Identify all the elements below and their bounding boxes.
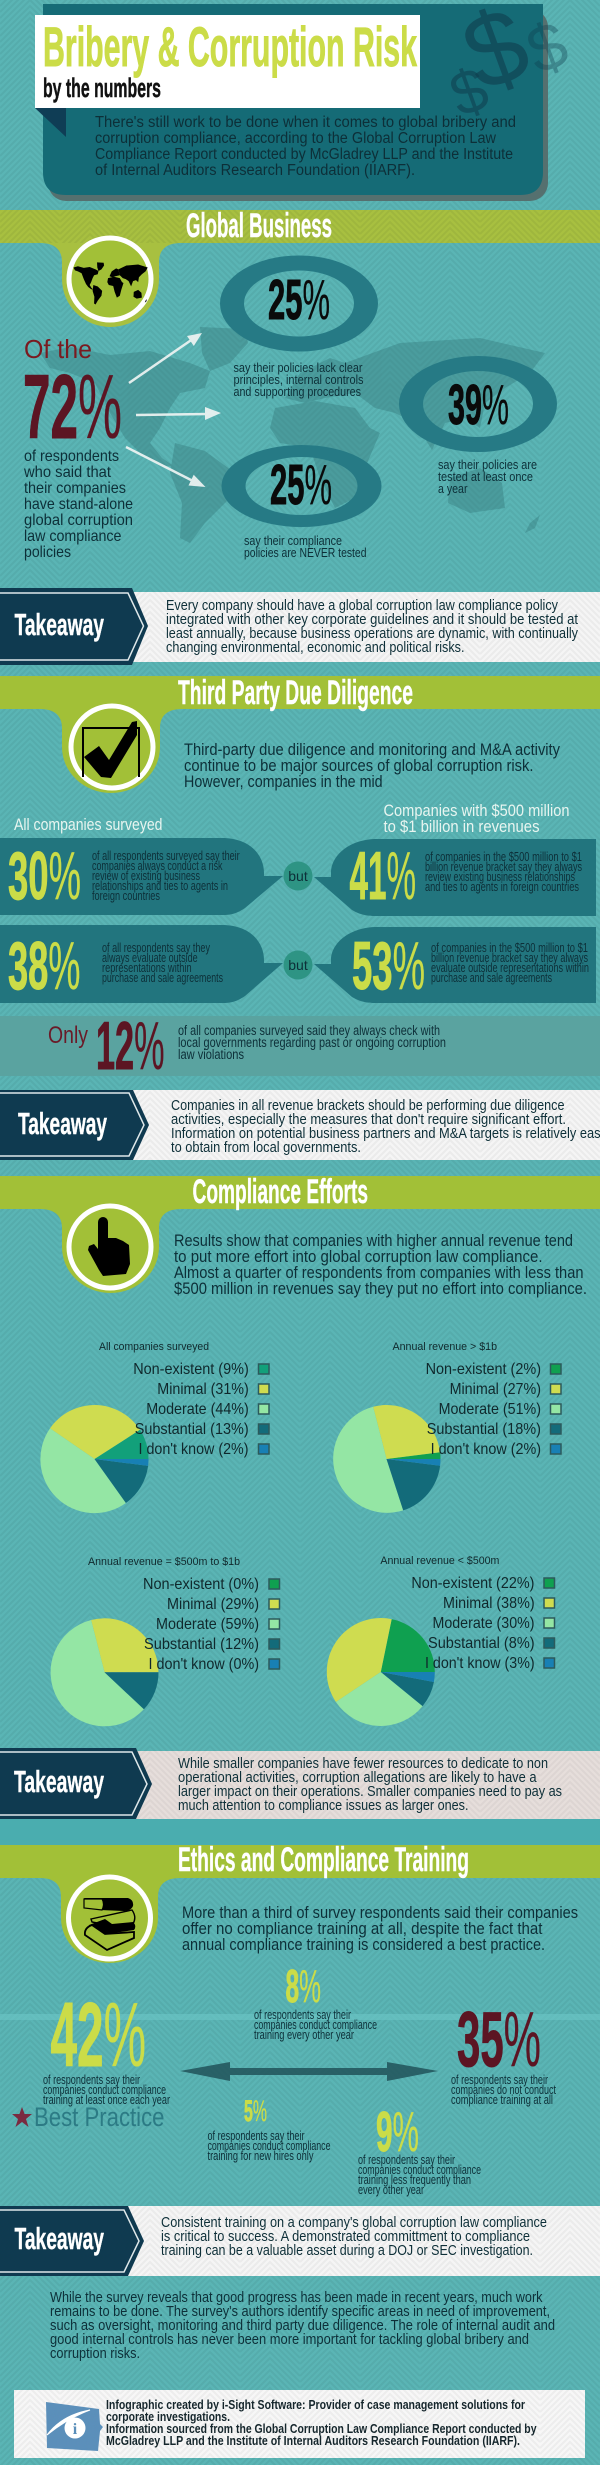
column label: mid-size companies: to $1 billion in revenues [384,817,540,836]
stat: of the 72 percent: their companies [24,480,126,497]
pie chart: all companies surveyed: Minimal (31%) [157,1381,249,1398]
takeaway 1: Takeaway [14,607,104,642]
pie chart: annual revenue under 500m: Substantial (8%) [428,1635,535,1652]
intro text: Compliance Report conducted by McGladrey LLP and the Institute [95,146,513,163]
section band [0,676,600,793]
stat: 9 percent: every other year [358,2183,424,2197]
stat: of the 72 percent: policies [24,544,71,561]
pie chart: annual revenue over 1b [333,1341,561,1513]
stat: 5 percent: companies conduct compliance [208,2139,331,2153]
takeaway 4: is critical to success. A demonstrated committment to compliance [161,2228,530,2245]
takeaway 4 [0,2206,600,2276]
intro text: corruption compliance, according to the Global Corruption Law [95,130,497,147]
stat: 8 percent: training every other year [254,2028,354,2042]
pie chart: annual revenue over 1b: Non-existent (2%) [426,1361,541,1378]
column label: mid-size companies [384,801,570,836]
best practice badge: Best Practice [34,2102,164,2132]
callout: only 12 percent [0,1008,600,1084]
stat: 30 percent: review of existing business [92,869,200,883]
stat: 42 percent: 42% [50,1985,146,2086]
stat: 38 percent [0,925,283,1004]
pie chart: annual revenue 500m to 1b: Minimal (29%) [167,1596,259,1613]
stat: 38 percent: purchase and sale agreements [102,971,223,985]
section band [0,1845,600,1963]
pie chart: all companies surveyed: Non-existent (9%) [133,1361,249,1378]
intro text [182,1904,578,1954]
column label: all companies: All companies surveyed [14,815,162,834]
heading: Compliance Efforts [192,1173,368,1211]
stat: 30 percent: foreign countries [92,889,160,903]
stat: 41 percent [314,838,596,916]
pie chart: annual revenue 500m to 1b: I don't know (0%) [148,1656,259,1673]
intro text: However, companies in the mid [184,773,383,791]
intro text: to put more effort into global corruption law compliance. [174,1248,542,1266]
but badge [284,950,312,980]
stat: 53 percent: purchase and sale agreements [431,971,552,985]
closing paragraph: corruption risks. [50,2345,140,2362]
callout: only 12 percent: 12% [96,1008,164,1084]
icon: stack of books [68,1877,150,1959]
pie chart: annual revenue 500m to 1b: Non-existent (0%) [143,1576,259,1593]
stat: 30 percent: companies always conduct a risk [92,859,223,873]
stat: 42 percent: training at least once each year [43,2093,170,2107]
stat: 8 percent [254,1960,377,2042]
stat: 38 percent: representations within [102,961,192,975]
stat: 5 percent: training for new hires only [208,2149,314,2163]
stat: 5 percent: of respondents say their [208,2129,304,2143]
credits text: McGladrey LLP and the Institute of Internal Auditors Research Foundation (IIARF). [106,2433,520,2448]
stat: 8 percent: of respondents say their [254,2008,351,2022]
pie chart: annual revenue under 500m: Annual revenue < $500m [380,1555,499,1567]
takeaway 2: to obtain from local governments. [171,1139,361,1156]
stat: 25 percent never tested: policies are NEVER tested [244,545,366,560]
stat: 35 percent [451,1995,556,2107]
stat: of the 72 percent: global corruption [24,512,133,529]
intro text: There's still work to be done when it comes to global bribery and [95,114,516,131]
intro text: continue to be major sources of global corruption risk. [184,757,534,775]
stat: 9 percent: 9% [376,2100,419,2164]
intro text: offer no compliance training at all, despite the fact that [182,1920,543,1938]
stat: of the 72 percent: have stand-alone [24,496,133,513]
stat: of the 72 percent: 72% [23,357,122,458]
stat: 35 percent: 35% [457,1995,541,2083]
stat: of the 72 percent: law compliance [24,528,122,545]
stat: 39 percent tested annually: 39% [448,373,509,437]
pie chart: annual revenue 500m to 1b: Substantial (12%) [144,1636,259,1653]
background world map [40,327,545,543]
section band [0,210,600,327]
heading: Global Business [186,207,332,245]
stat: of the 72 percent: of respondents [24,448,119,465]
takeaway 2: Takeaway [18,1106,107,1141]
but badge: but [288,868,308,884]
stat: 42 percent: companies conduct compliance [43,2083,166,2097]
intro text [95,114,516,179]
stat: 25 percent lack principles: 25% [268,268,330,332]
stat: 8 percent: companies conduct compliance [254,2018,377,2032]
stat: of the 72 percent: Of the [24,334,92,364]
arrows [126,333,221,487]
stat: 8 percent: 8% [286,1960,321,2012]
pie chart: annual revenue over 1b: Minimal (27%) [450,1381,541,1398]
stat: 39 percent tested annually: tested at least once [438,469,533,484]
icon: dollar signs [441,0,577,131]
takeaway 3 [0,1748,600,1819]
stat: 53 percent [314,927,596,1004]
heading: Third Party Due Diligence [178,674,413,712]
pie chart: annual revenue 500m to 1b [51,1556,280,1726]
but badge [284,862,312,890]
callout: only 12 percent: of all companies surveyed said they always check with [178,1023,440,1038]
pie chart: annual revenue over 1b: Moderate (51%) [439,1401,541,1418]
takeaway 3: Takeaway [14,1764,104,1799]
stat: 30 percent: 30% [8,838,81,914]
stat: 5 percent: 5% [244,2095,267,2128]
pie chart: annual revenue 500m to 1b: Moderate (59%) [156,1616,259,1633]
intro text: of Internal Auditors Research Foundation (IIARF). [95,162,415,179]
icon: world map [69,238,151,320]
takeaway 3: operational activities, corruption allegations are likely to have a [178,1769,537,1786]
pie chart: all companies surveyed: I don't know (2%) [138,1441,248,1458]
stat: 35 percent: companies do not conduct [451,2083,556,2097]
stat: 30 percent: relationships and ties to agents in [92,879,228,893]
icon: checkbox [71,706,153,788]
icon: dollar signs: $ [517,6,577,88]
stat: of the 72 percent [23,334,133,561]
pie chart: annual revenue 500m to 1b: Annual revenue = $500m to $1b [88,1556,240,1568]
panel: header [35,0,577,201]
pie chart: annual revenue under 500m: Non-existent (22%) [411,1575,534,1592]
panel: third party due diligence [0,674,600,1084]
pie chart: all companies surveyed: Substantial (13%) [135,1421,249,1438]
stat: 41 percent: 41% [350,838,416,914]
panel: footer credits [14,2390,585,2458]
stat: 53 percent: 53% [352,928,425,1004]
stat: 25 percent lack principles [220,255,378,399]
stat: 25 percent never tested: 25% [270,453,332,517]
takeaway 1: changing environmental, economic and political risks. [166,639,464,656]
intro text: annual compliance training is considered a best practice. [182,1936,545,1954]
stat: 42 percent: of respondents say their [43,2073,140,2087]
stat: 5 percent [208,2095,331,2163]
subtitle: by the numbers [43,73,161,103]
callout: only 12 percent: Only [48,1022,88,1049]
pie chart: all companies surveyed: Moderate (44%) [146,1401,249,1418]
icon: i-Sight logo: i [73,2421,78,2438]
stat: 39 percent tested annually: say their policies are [438,457,537,472]
pie chart: annual revenue under 500m: I don't know (3%) [425,1655,535,1672]
takeaway 3: much attention to compliance issues as larger ones. [178,1797,468,1814]
stat: of the 72 percent: who said that [23,464,112,481]
panel: ethics and compliance training [0,1841,600,2197]
stat: 9 percent: companies conduct compliance [358,2163,481,2177]
but badge: but [288,957,308,973]
stat: 38 percent: of all respondents say they [102,941,211,955]
takeaway 2 [0,1090,600,1160]
closing paragraph: good internal controls has never been more important for tackling global bribery and [50,2331,529,2348]
pie chart: all companies surveyed [40,1341,269,1513]
callout: only 12 percent: local governments regarding past or ongoing corruption [178,1035,446,1050]
closing paragraph [50,2289,555,2362]
pie chart: annual revenue over 1b: Annual revenue > $1b [392,1341,497,1353]
column label: mid-size companies: Companies with $500 million [384,801,570,820]
intro text [174,1232,587,1298]
stat: 39 percent tested annually: a year [438,481,468,496]
stat: 35 percent: of respondents say their [451,2073,548,2087]
stat: 9 percent [358,2100,481,2197]
takeaway 4: Takeaway [14,2221,104,2256]
pie chart: annual revenue over 1b: I don't know (2%) [431,1441,541,1458]
takeaway 1 [0,588,600,665]
intro text: Third-party due diligence and monitoring and M&A activity [184,741,561,759]
credits text [106,2397,537,2448]
stat: 25 percent lack principles: principles, internal controls [234,372,364,387]
stat: 35 percent: compliance training at all [451,2093,553,2107]
pie chart: all companies surveyed: All companies surveyed [99,1341,209,1353]
pie chart: annual revenue under 500m: Moderate (30%) [432,1615,534,1632]
stat: 30 percent: of all respondents surveyed say their [92,849,240,863]
section band [0,1176,600,1293]
panel: global business [0,207,600,561]
icon: i-Sight logo [46,2402,103,2451]
pie chart: annual revenue under 500m [327,1555,554,1726]
stat: 30 percent [0,838,283,915]
panel: compliance efforts [0,1173,600,1726]
stat: 25 percent lack principles: say their policies lack clear [234,360,363,375]
stat: 39 percent tested annually [399,356,557,496]
icon: pointing hand [69,1206,151,1288]
pie chart: annual revenue over 1b: Substantial (18%) [427,1421,541,1438]
stat: 9 percent: of respondents say their [358,2153,455,2167]
stat: 38 percent: always evaluate outside [102,951,198,965]
stat: 25 percent never tested: say their compliance [244,533,342,548]
stat: 25 percent never tested [222,445,382,560]
double-headed arrow [180,2062,438,2081]
takeaway 4: training can be a valuable asset during a DOJ or SEC investigation. [161,2242,533,2259]
callout: only 12 percent: law violations [178,1047,244,1062]
icon: dollar signs: $ [441,54,497,131]
intro text [184,741,561,791]
stat: 38 percent: 38% [8,928,80,1004]
credits text: corporate investigations. [106,2409,230,2424]
pie chart: annual revenue under 500m: Minimal (38%) [443,1595,535,1612]
stat: 9 percent: training less frequently than [358,2173,471,2187]
stat: 25 percent lack principles: and supporting procedures [234,384,361,399]
